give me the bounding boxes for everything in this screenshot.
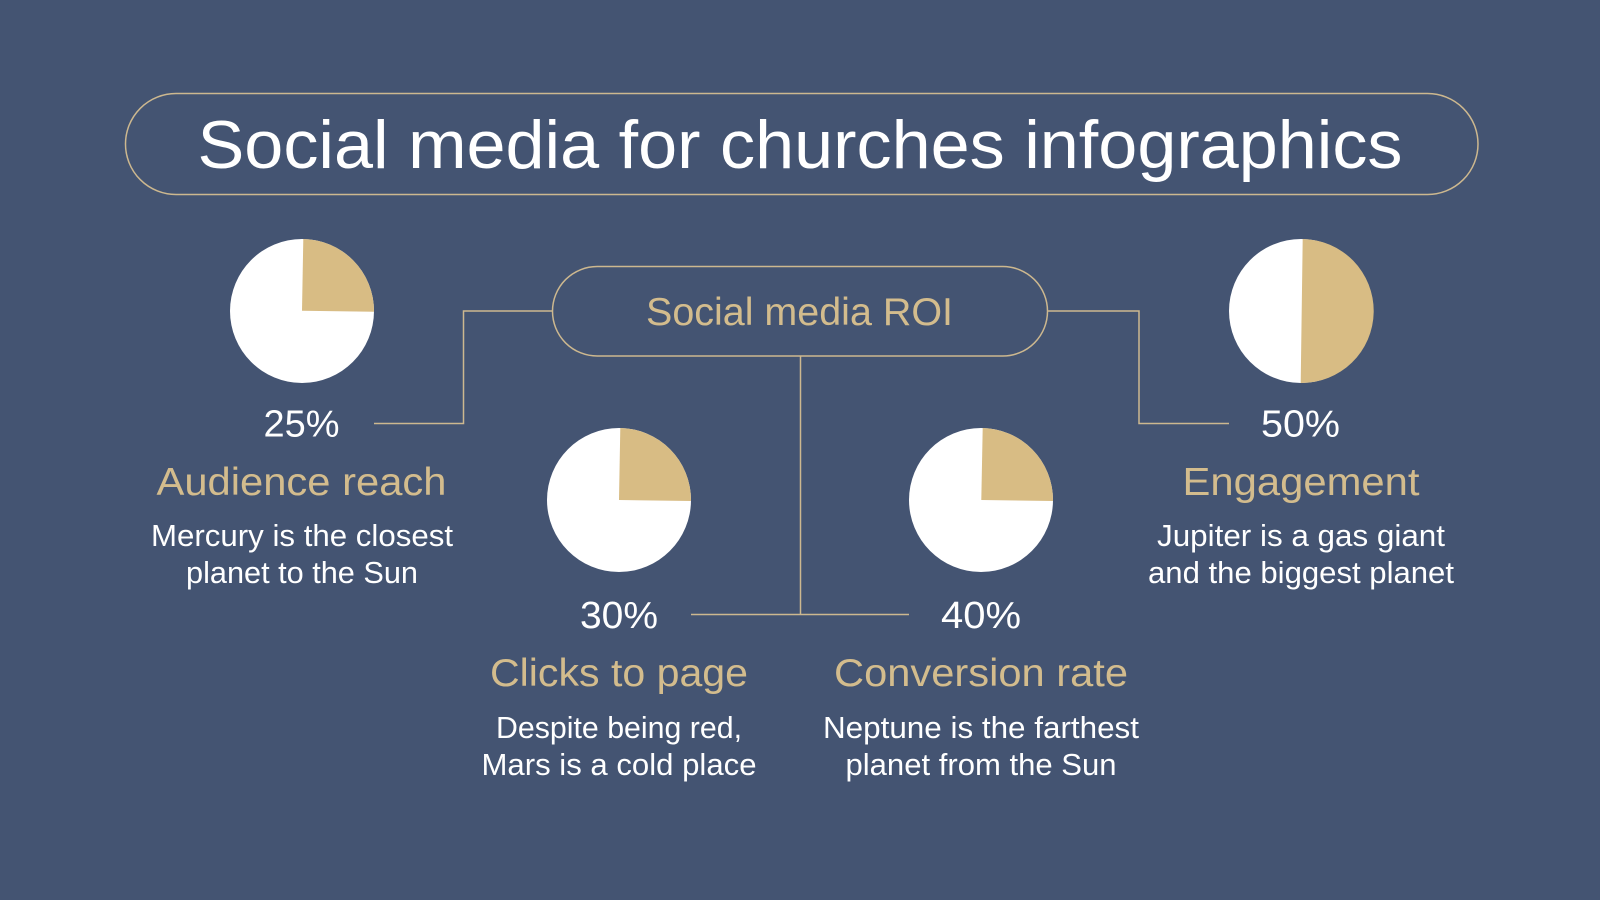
heading: clicks to page: Clicks to page [490, 652, 748, 695]
description: mars: Despite being red, [496, 711, 742, 745]
item: audience reach [151, 239, 454, 590]
description: mercury: Mercury is the closest [151, 519, 454, 553]
heading: audience reach: Audience reach [156, 461, 446, 504]
item: engagement [1148, 239, 1455, 590]
value: 40%: 40% [941, 595, 1021, 637]
description: jupiter: Jupiter is a gas giant [1157, 519, 1446, 553]
pie chart: 50% [1229, 239, 1374, 383]
value: 50%: 50% [1261, 404, 1340, 446]
description: mars [482, 711, 756, 782]
value: 25%: 25% [264, 404, 340, 446]
description: neptune: Neptune is the farthest [823, 711, 1140, 745]
description: neptune [823, 711, 1140, 782]
heading: conversion rate: Conversion rate [834, 652, 1128, 695]
pie chart: 25% [230, 239, 374, 383]
connector: hub to audience reach [374, 311, 552, 424]
pie chart: 30% [547, 428, 691, 572]
connector: hub to clicks and conversion [691, 356, 909, 614]
pie chart: 40% [909, 428, 1053, 572]
item: clicks to page [482, 428, 756, 782]
description: mercury [151, 519, 454, 590]
description: jupiter [1148, 519, 1455, 590]
value: 30%: 30% [580, 595, 658, 637]
connector: hub to engagement [1048, 311, 1229, 424]
hub pill: social media ROI: Social media ROI [646, 291, 953, 334]
title pill: Social media for churches infographics [198, 107, 1402, 183]
description: mercury: planet to the Sun [186, 556, 418, 590]
heading: engagement: Engagement [1182, 461, 1420, 504]
description: jupiter: and the biggest planet [1148, 556, 1455, 590]
title pill [126, 94, 1478, 194]
item: conversion rate [823, 428, 1140, 782]
description: mars: Mars is a cold place [482, 748, 756, 782]
description: neptune: planet from the Sun [846, 748, 1116, 782]
hub pill: social media ROI [552, 266, 1048, 356]
